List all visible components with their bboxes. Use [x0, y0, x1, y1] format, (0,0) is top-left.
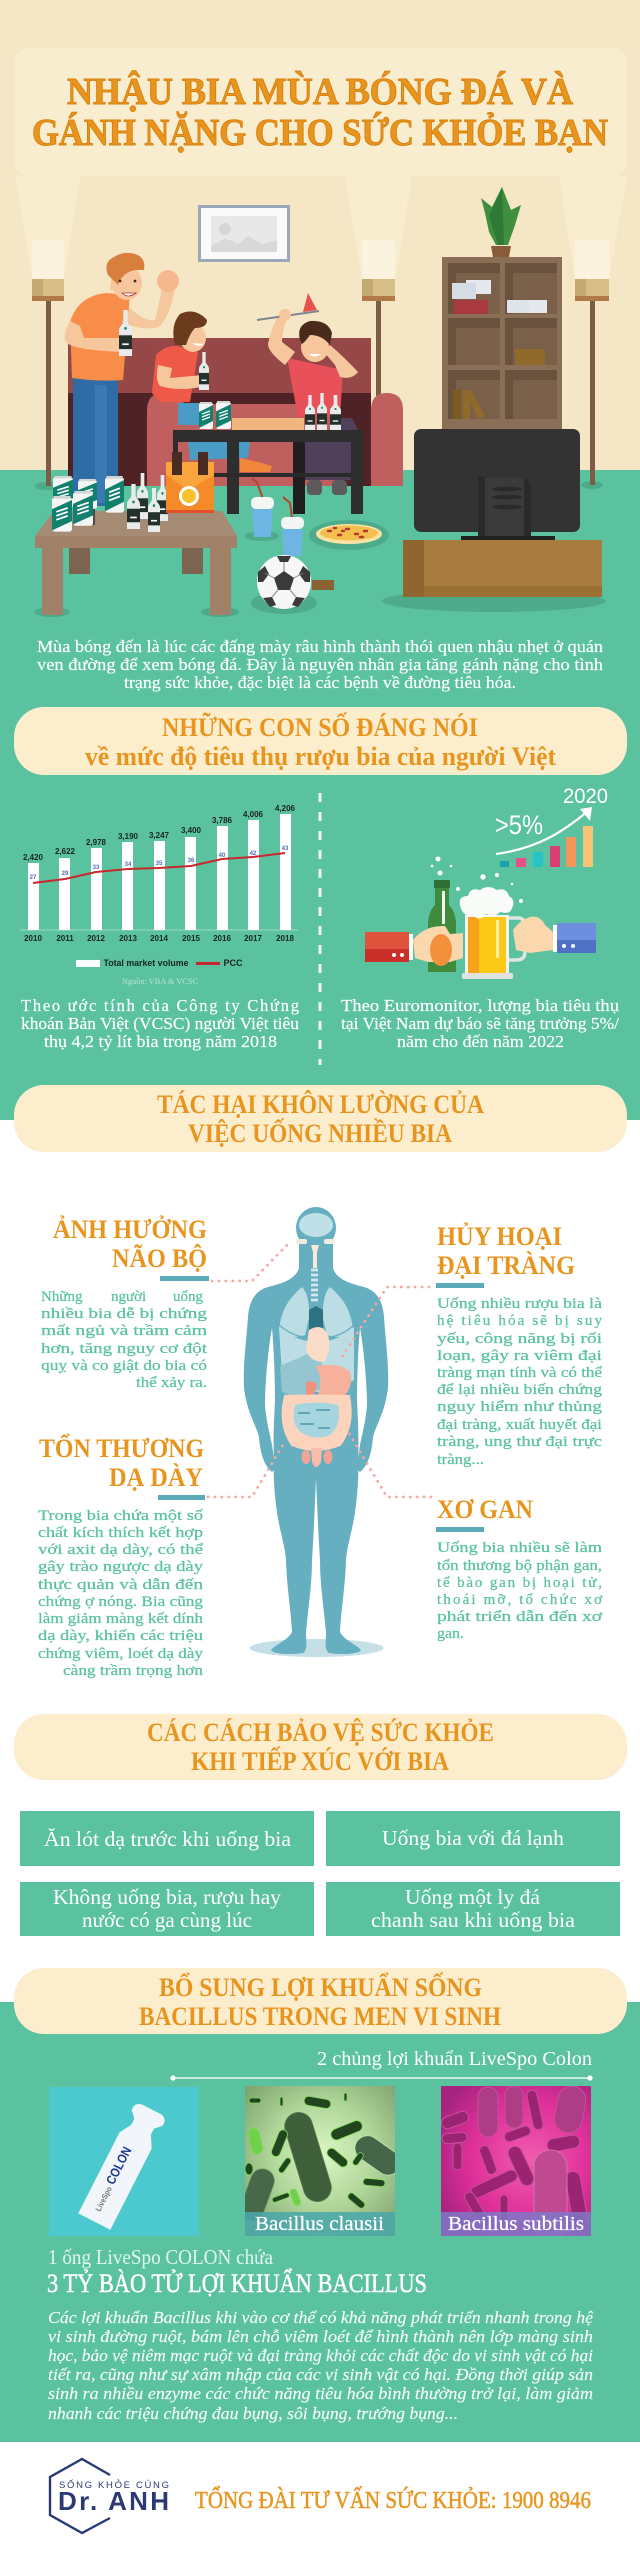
tip: lemon ice: chanh sau khi uống bia	[371, 1908, 576, 1932]
callout: stomach: chứng ợ nóng. Bia cũng	[38, 1594, 204, 1610]
product claim	[47, 2245, 427, 2298]
growth chart and >5%: >5%	[495, 810, 543, 840]
human body illustration	[244, 1207, 388, 1657]
bar chart: beer market volume: Total market volume	[104, 958, 188, 968]
bar chart: beer market volume	[20, 804, 298, 986]
bar chart: beer market volume: 29	[62, 871, 69, 877]
person: seated fan in red	[152, 312, 272, 472]
callout: stomach: với axit dạ dày, có thể	[38, 1542, 203, 1558]
logo: Dr. Anh: SỐNG KHỎE CÙNG	[59, 2479, 169, 2491]
tip: eat first: Ăn lót dạ trước khi uống bia	[44, 1827, 292, 1851]
callout: stomach: chất kích thích kết hợp	[38, 1525, 203, 1541]
callout: cirrhosis: thoái mỡ, tổ chức xơ	[437, 1592, 603, 1608]
coffee table with snacks	[173, 393, 363, 514]
cheers illustration: beer bottle and mug	[365, 856, 596, 979]
bar chart: beer market volume: 2018	[276, 934, 294, 943]
tip: cold beer	[326, 1811, 620, 1866]
callout: brain: quỵ và co giật do bia có	[41, 1358, 207, 1374]
callout: brain: hơn, tăng nguy cơ đột	[41, 1341, 208, 1357]
callout: stomach: thực quản và dẫn đến	[38, 1577, 204, 1593]
callout: colon: đại tràng, xuất huyết đại	[437, 1417, 602, 1433]
cans, bottles and beer pack	[52, 452, 214, 532]
callout: brain: NÃO BỘ	[112, 1244, 207, 1273]
sofa	[68, 338, 403, 486]
callout: brain: mất ngủ và trầm cảm	[41, 1323, 207, 1339]
dotted callout lines	[208, 1242, 431, 1497]
section heading: protection	[14, 1714, 627, 1780]
bacteria tile: Bacillus subtilis	[440, 2084, 591, 2240]
callout: stomach: TỔN THƯƠNG	[39, 1434, 204, 1463]
bar chart: beer market volume: 34	[125, 862, 132, 868]
callout: colon: nguy hiểm như thủng	[437, 1399, 603, 1415]
section heading: protection: CÁC CÁCH BẢO VỆ SỨC KHỎE	[147, 1718, 494, 1747]
strains label and line	[170, 2048, 593, 2081]
callout: brain: nhiều bia dễ bị chứng	[41, 1306, 208, 1322]
tip: no mixing	[20, 1882, 314, 1936]
bar chart: beer market volume: 2013	[119, 934, 137, 943]
tip: no mixing: nước có ga cùng lúc	[82, 1908, 252, 1932]
bacillus explanation: vi sinh đường ruột, bám lên chỗ viêm loét để hình thành nên lớp màng sinh	[48, 2327, 593, 2346]
bar chart: beer market volume: 2010	[24, 934, 42, 943]
text: Euromonitor forecast: tại Việt Nam dự báo sẽ tăng trưởng 5%/	[341, 1014, 619, 1033]
person: standing fan in orange	[65, 253, 179, 506]
section heading: statistics: NHỮNG CON SỐ ĐÁNG NÓI	[162, 713, 478, 742]
callout: cirrhosis	[436, 1495, 603, 1642]
callout: colon	[436, 1222, 603, 1468]
callout: colon: tràng, ung thư đại trực	[437, 1434, 602, 1450]
callout: stomach	[38, 1434, 205, 1679]
bar chart: beer market volume: 42	[250, 851, 257, 857]
bacillus explanation: Các lợi khuẩn Bacillus khi vào cơ thể có khả năng phát triển nhanh trong hệ	[48, 2308, 593, 2327]
bar chart: beer market volume: 2015	[182, 934, 200, 943]
section heading: probiotics	[14, 1968, 627, 2034]
bacillus explanation: tiết ra, cũng như sự xâm nhập của các vi sinh vật có hại. Đồng thời giúp sản	[48, 2365, 593, 2384]
section heading: protection: KHI TIẾP XÚC VỚI BIA	[191, 1747, 449, 1776]
bar chart: beer market volume: 36	[188, 858, 195, 864]
section heading: harms: TÁC HẠI KHÔN LƯỜNG CỦA	[157, 1090, 484, 1119]
bar chart: beer market volume: 3,400	[181, 826, 202, 835]
intro text: trạng sức khỏe, đặc biệt là các bệnh về đường tiêu hóa.	[124, 673, 516, 692]
bar chart: beer market volume: 4,006	[243, 810, 264, 819]
bar chart: beer market volume: 3,786	[212, 816, 233, 825]
bar chart: beer market volume: 3,190	[118, 832, 139, 841]
football	[251, 555, 334, 614]
strains label and line: 2 chủng lợi khuẩn LiveSpo Colon	[317, 2048, 592, 2070]
pizza	[309, 520, 389, 550]
text: Euromonitor forecast	[341, 996, 619, 1051]
plant	[481, 187, 521, 257]
tip: lemon ice: Uống một ly đá	[405, 1885, 541, 1909]
callout: colon: tràng...	[437, 1452, 484, 1468]
bar chart: beer market volume: 2014	[150, 934, 168, 943]
bar chart: beer market volume: 2011	[56, 934, 74, 943]
bar chart: beer market volume: 2,622	[55, 847, 76, 856]
bacillus explanation: sinh ra nhiều enzyme các chức năng tiêu hóa bình thường trở lại, làm giảm	[48, 2384, 593, 2403]
section heading: probiotics: BỔ SUNG LỢI KHUẨN SỐNG	[159, 1973, 482, 2002]
intro text	[37, 637, 604, 692]
bar chart: beer market volume: 2,420	[23, 853, 44, 862]
product claim: 1 ống LiveSpo COLON chứa	[48, 2245, 274, 2269]
vertical dashed divider	[318, 793, 322, 1065]
callout: cirrhosis: gan.	[437, 1626, 464, 1642]
TV on cabinet	[382, 429, 606, 612]
drink cups	[245, 479, 304, 556]
section heading: statistics	[14, 707, 627, 775]
callout: colon: hệ tiêu hóa sẽ bị suy	[437, 1313, 602, 1329]
callout: stomach: càng trầm trọng hơn	[63, 1663, 204, 1679]
callout: stomach: gây trào ngược dạ dày	[38, 1559, 204, 1575]
callout: brain: Những	[41, 1289, 83, 1305]
callout: stomach: làm giảm màng kết dính	[38, 1611, 204, 1627]
callout: brain: thể xảy ra.	[136, 1375, 207, 1391]
title	[32, 71, 608, 154]
section heading: statistics: về mức độ tiêu thụ rượu bia của người Việt	[85, 742, 556, 771]
callout: colon: Uống nhiều rượu bia là	[437, 1296, 602, 1312]
callout: brain: người	[111, 1289, 146, 1305]
bar chart: beer market volume: 2012	[87, 934, 105, 943]
product claim: 3 TỶ BÀO TỬ LỢI KHUẨN BACILLUS	[47, 2269, 427, 2298]
text: Euromonitor forecast: năm cho đến năm 2022	[397, 1032, 564, 1051]
bar chart: beer market volume: 40	[219, 853, 226, 859]
intro text: ven đường để xem bóng đá. Đây là nguyên nhân gia tăng gánh nặng cho tình	[37, 655, 604, 674]
callout: stomach: dạ dày, khiến các triệu	[38, 1628, 204, 1644]
callout: brain: ẢNH HƯỞNG	[53, 1215, 207, 1244]
bacillus explanation	[48, 2308, 593, 2423]
callout: cirrhosis: tế bào gan bị hoại tử,	[437, 1575, 602, 1591]
side table	[34, 511, 239, 617]
hotline: TỔNG ĐÀI TƯ VẤN SỨC KHỎE: 1900 8946	[195, 2487, 591, 2514]
bookshelf	[442, 257, 562, 435]
bar chart: beer market volume: 33	[93, 865, 100, 871]
section heading: probiotics: BACILLUS TRONG MEN VI SINH	[139, 2002, 501, 2031]
tip: no mixing: Không uống bia, rượu hay	[53, 1885, 282, 1909]
callout: cirrhosis: tổn thương bộ phận gan,	[437, 1558, 602, 1574]
text: VCSC estimate	[21, 996, 299, 1051]
callout: colon: tràng mạn tính và có thể	[437, 1365, 602, 1381]
callout: colon: loạn, gây ra viêm đại	[437, 1348, 602, 1364]
callout: brain: uống	[173, 1289, 204, 1305]
callout: stomach: DẠ DÀY	[109, 1463, 203, 1492]
text: VCSC estimate: Theo ước tính của Công ty Chứng	[21, 996, 299, 1015]
logo: Dr. Anh: Dr. ANH	[58, 2486, 169, 2516]
bar chart: beer market volume: Nguồn: VBA & VCSC	[122, 976, 198, 986]
tip: cold beer: Uống bia với đá lạnh	[382, 1826, 565, 1850]
bacillus explanation: nhanh các triệu chứng đau bụng, sôi bụng, trướng bụng...	[48, 2404, 458, 2423]
product tile: LiveSpo COLON vial: LiveSpo COLON	[89, 2144, 134, 2213]
callout: colon: ĐẠI TRÀNG	[437, 1251, 575, 1280]
floor lamps	[32, 279, 609, 490]
bar chart: beer market volume: 2017	[244, 934, 262, 943]
bar chart: beer market volume: 27	[30, 875, 37, 881]
callout: colon: yếu, công năng bị rối	[437, 1331, 602, 1347]
growth chart and >5%: 2020	[563, 785, 608, 808]
text: VCSC estimate: khoán Bản Việt (VCSC) người Việt tiêu	[21, 1014, 299, 1033]
picture on wall	[198, 205, 290, 262]
tip: lemon ice	[326, 1882, 620, 1936]
product tile: LiveSpo COLON vial	[49, 2087, 199, 2236]
callout: colon: để lại nhiều biến chứng	[437, 1382, 603, 1398]
bar chart: beer market volume: 2,978	[86, 838, 107, 847]
callout: stomach: chứng viêm, loét dạ dày	[38, 1646, 204, 1662]
text: VCSC estimate: thụ 4,2 tỷ lít bia trong năm 2018	[44, 1032, 277, 1051]
bar chart: beer market volume: 2016	[213, 934, 231, 943]
bacteria tile: Bacillus subtilis: Bacillus subtilis	[448, 2213, 584, 2235]
intro text: Mùa bóng đến là lúc các đấng mày râu hình thành thói quen nhậu nhẹt ở quán	[37, 637, 603, 656]
bacteria tile: Bacillus clausii: Bacillus clausii	[255, 2213, 384, 2235]
section heading: harms: VIỆC UỐNG NHIỀU BIA	[188, 1119, 452, 1148]
bar chart: beer market volume: PCC	[223, 958, 243, 968]
section heading: harms	[14, 1085, 627, 1152]
bacillus explanation: học, bảo vệ niêm mạc ruột và đại tràng khỏi các chất độc do vi sinh vật có hại	[48, 2346, 593, 2365]
bar chart: beer market volume: 43	[282, 846, 289, 852]
callout: cirrhosis: phát triển dẫn đến xơ	[437, 1609, 603, 1625]
tip: eat first	[20, 1811, 314, 1866]
callout: cirrhosis: Uống bia nhiều sẽ làm	[437, 1540, 602, 1556]
text: Euromonitor forecast: Theo Euromonitor, lượng bia tiêu thụ	[341, 996, 619, 1015]
bar chart: beer market volume: 4,206	[275, 804, 296, 813]
bacteria tile: Bacillus clausii	[245, 2086, 395, 2236]
logo: Dr. Anh	[50, 2459, 169, 2533]
growth chart and >5%	[495, 785, 608, 867]
callout: stomach: Trong bia chứa một số	[38, 1508, 204, 1524]
callout: colon: HỦY HOẠI	[437, 1222, 562, 1251]
callout: cirrhosis: XƠ GAN	[437, 1495, 533, 1524]
bar chart: beer market volume: 35	[156, 861, 163, 867]
title panel with lamp glow	[15, 48, 627, 279]
title: NHẬU BIA MÙA BÓNG ĐÁ VÀ	[67, 71, 574, 113]
callout: brain	[41, 1215, 209, 1391]
person: seated fan with flag	[257, 293, 358, 495]
bar chart: beer market volume: 3,247	[149, 831, 170, 840]
